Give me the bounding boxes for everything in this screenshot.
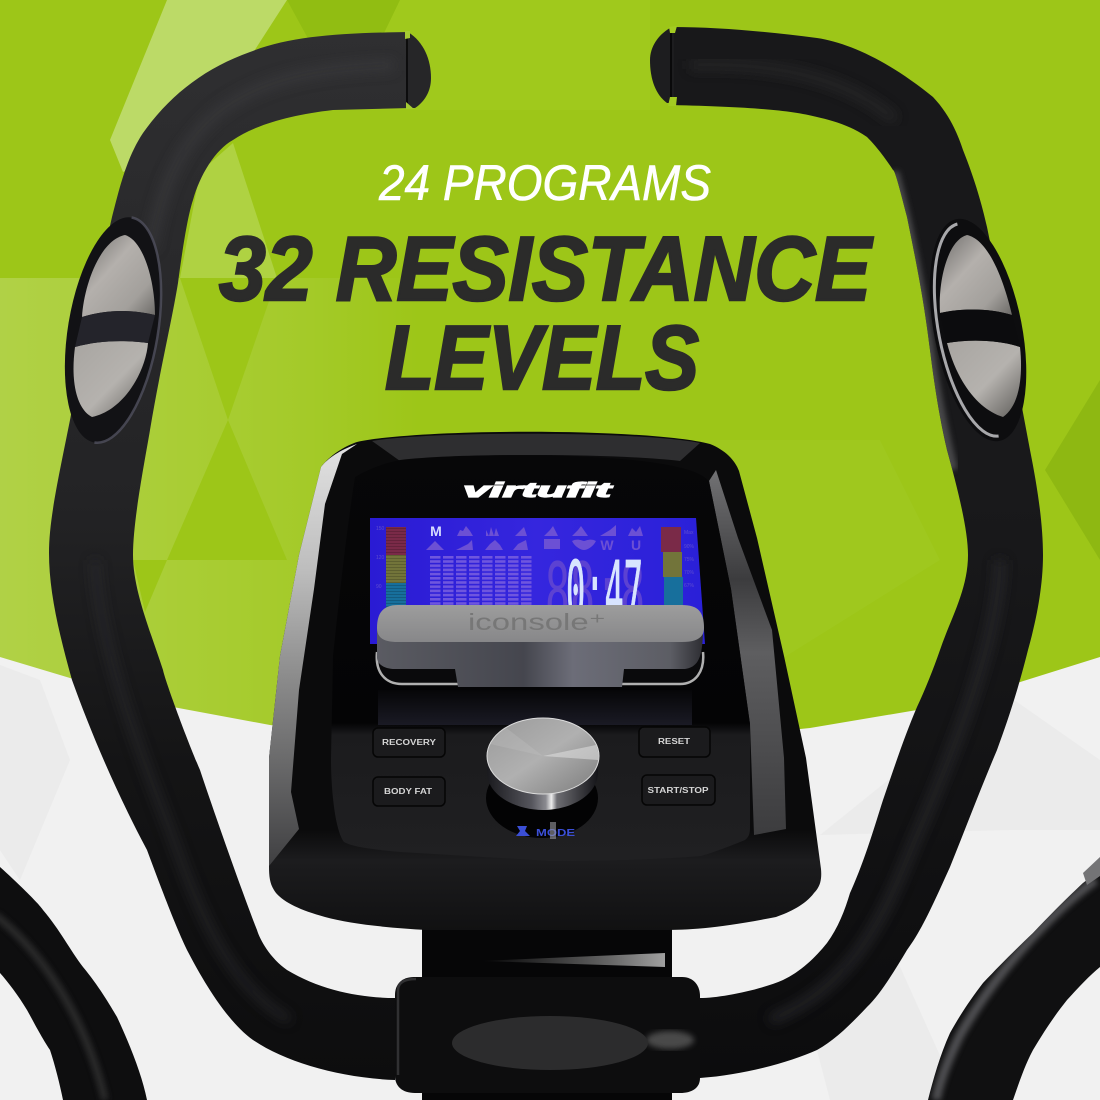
- lower silver plate: [947, 341, 1021, 417]
- ghost digits: 88:8: [545, 546, 645, 639]
- top bevel: [372, 434, 700, 461]
- hub oval: [452, 1016, 648, 1070]
- meter scale labels: [376, 526, 695, 590]
- heading: 32 resistance: 32 RESISTANCE: [219, 219, 873, 320]
- right handle end cap: [650, 26, 677, 106]
- body fat button: [373, 777, 445, 806]
- console housing: [269, 432, 821, 930]
- right meter: [661, 527, 683, 607]
- start/stop button: START/STOP: [648, 786, 709, 795]
- right handlebar: [650, 26, 1043, 1078]
- upper silver plate: [82, 235, 155, 317]
- white curved lower section: [0, 657, 1100, 1100]
- hub highlight: [646, 1031, 694, 1049]
- lcd letters: [430, 523, 641, 553]
- lcd letters: M: [430, 523, 442, 539]
- iconsole tablet holder: [377, 605, 704, 687]
- left handle end cap: [405, 31, 431, 109]
- meter scale labels: 75%: [684, 557, 695, 563]
- lower left outer tube: [0, 867, 147, 1100]
- green background facets: [0, 0, 1100, 738]
- console neck and hub: [395, 915, 700, 1100]
- bar graph: [430, 556, 532, 608]
- mode label: [516, 822, 575, 839]
- upper silver plate: [940, 235, 1012, 315]
- virtufit logo: virtufit: [463, 480, 614, 502]
- meter scale labels: Max: [684, 530, 694, 536]
- meter scale labels: 90: [376, 584, 382, 590]
- left light edge: [269, 444, 357, 866]
- right grey edge: [709, 470, 786, 835]
- left meter: [386, 527, 406, 608]
- mode label: MODE: [536, 828, 575, 839]
- left pulse sensor: [50, 210, 176, 450]
- heading: 24 programs: 24 PROGRAMS: [378, 155, 711, 211]
- program icons: [426, 525, 643, 550]
- recovery button: RECOVERY: [382, 738, 437, 747]
- iconsole wordmark: iconsole⁺: [468, 609, 606, 635]
- right pulse sensor: [913, 211, 1043, 449]
- reset button: [639, 727, 710, 757]
- console glossy panel: [331, 455, 750, 861]
- meter scale labels: 150: [376, 526, 385, 532]
- center band: [940, 309, 1020, 347]
- center band: [75, 311, 155, 347]
- reset button: RESET: [658, 737, 690, 746]
- left handlebar: [49, 31, 431, 1080]
- lower right outer tube: [928, 857, 1100, 1100]
- lower silver plate: [74, 341, 148, 417]
- recovery button: [373, 728, 445, 757]
- start/stop button: [642, 775, 715, 805]
- lcd display: [370, 518, 705, 644]
- meter scale labels: 120: [376, 555, 385, 561]
- meter scale labels: 67%: [684, 583, 695, 589]
- lcd letters: U: [631, 537, 641, 553]
- grey facets on white section: [0, 665, 1100, 1100]
- mode dial: [486, 718, 599, 838]
- lcd display: 0:47: [566, 545, 643, 640]
- heading: levels: LEVELS: [385, 308, 699, 409]
- meter scale labels: 70%: [684, 570, 695, 576]
- body fat button: BODY FAT: [384, 787, 432, 796]
- panel dark recess below holder: [378, 690, 692, 725]
- meter scale labels: 90%: [684, 544, 695, 550]
- lcd letters: W: [600, 537, 614, 553]
